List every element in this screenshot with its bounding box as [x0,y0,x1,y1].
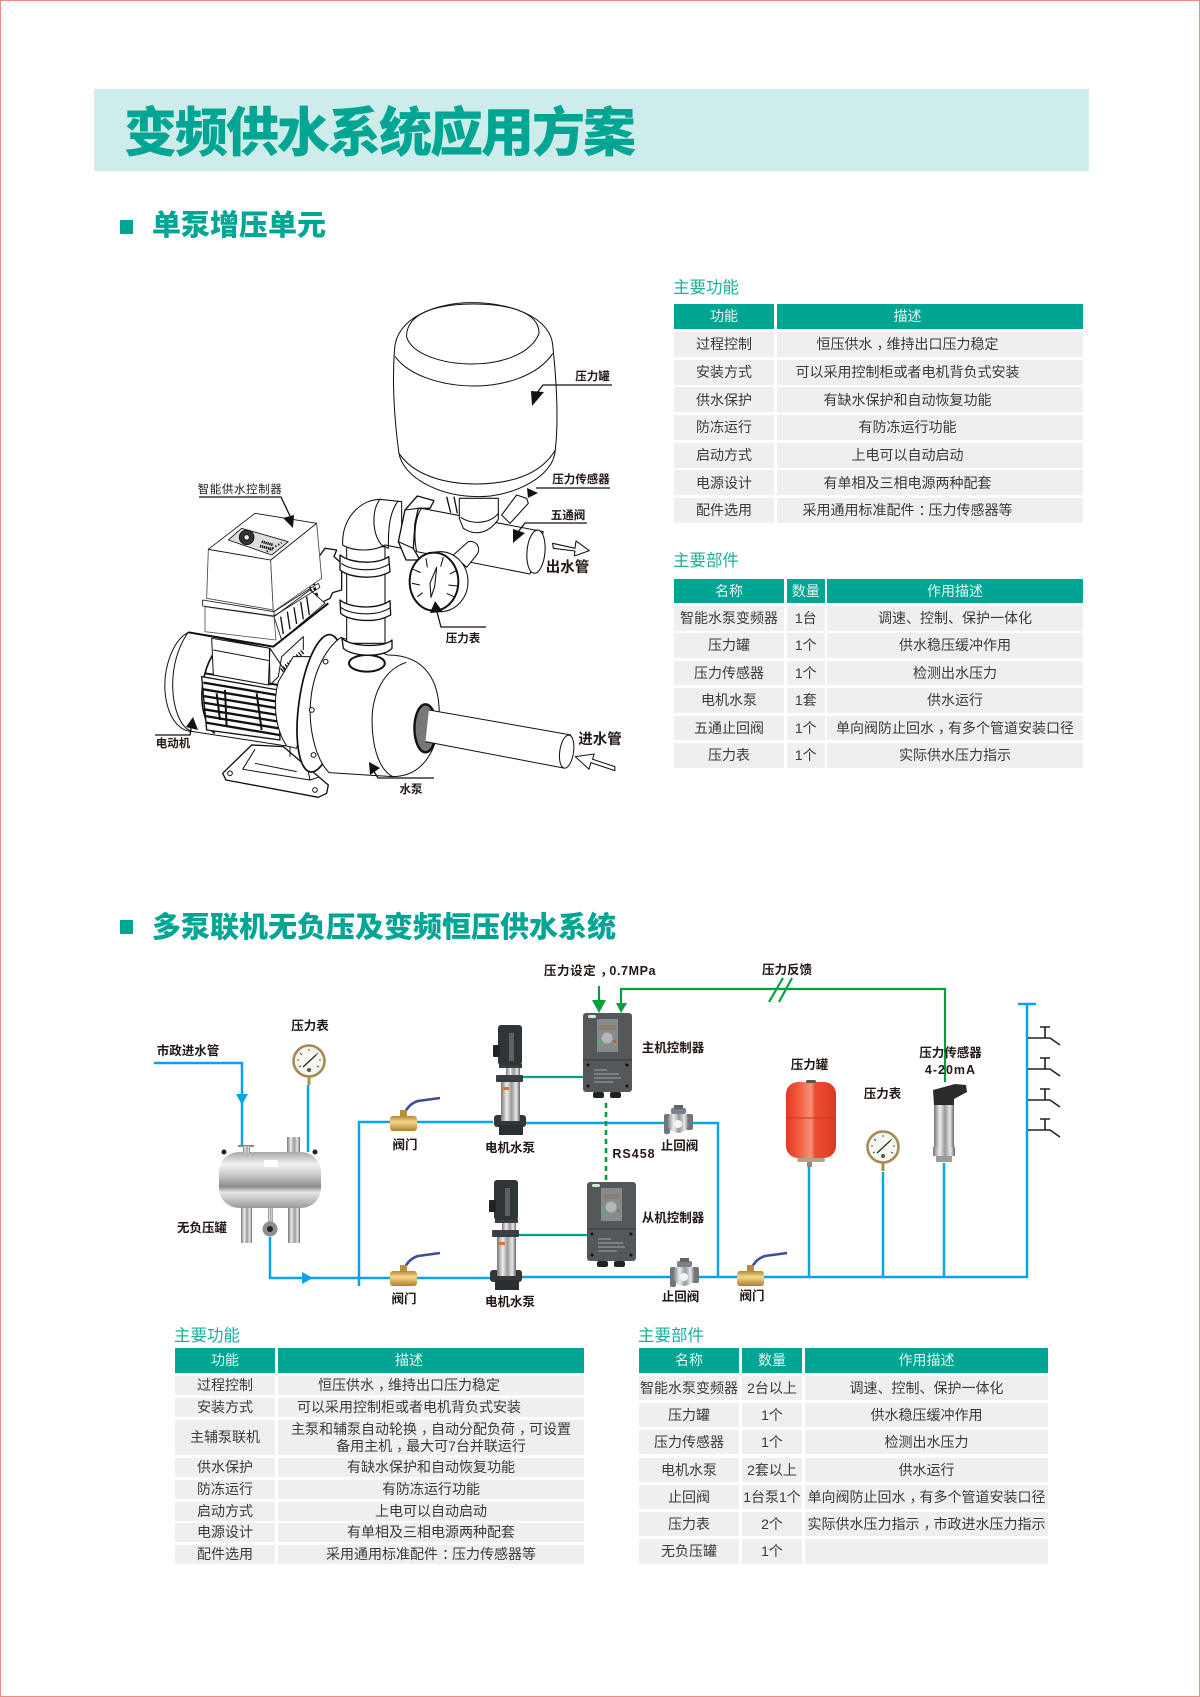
table: main functions 2: 安装方式 [197,1399,253,1415]
table: main functions 2: 有单相及三相电源两种配套 [347,1524,515,1540]
table: main functions 2: 可以采用控制柜或者电机背负式安装 [297,1399,521,1415]
label: main functions 1: 主要功能 [673,279,739,297]
table: main functions 1: 电源设计 [696,475,752,491]
table: main components 1: 1个 [795,637,817,653]
table: main components 2: 止回阀 [668,1489,710,1505]
label: master controller: 主机控制器 [642,1040,705,1055]
table: main functions 2: 上电可以自动启动 [375,1503,487,1519]
table: main functions 1 [674,304,1083,523]
table: main components 2: 1个 [761,1434,783,1450]
table: main functions 2: 过程控制 [197,1377,253,1393]
callout: five way valve: 五通阀 [551,508,585,522]
table: main functions 1: 供水保护 [696,392,752,408]
label: upper pump: 电机水泵 [485,1140,535,1155]
label: upper valve: 阀门 [392,1137,418,1152]
table: main functions 2: 有缺水保护和自动恢复功能 [347,1459,515,1475]
table: main components 1: 供水运行 [927,692,983,708]
table: main functions 2: 启动方式 [197,1503,253,1519]
label: outlet valve: 阀门 [739,1288,765,1303]
diagram: water supply piping [154,1004,1036,1286]
callout: five way valve [513,508,587,543]
table: main functions 1: 有单相及三相电源两种配套 [824,475,992,491]
table: main components 2: 压力传感器 [654,1434,724,1450]
table: main functions 1: 可以采用控制柜或者电机背负式安装 [796,364,1020,380]
table: main functions 1: 恒压供水 ，维持出口压力稳定 [816,336,998,352]
table: main functions 2: 电源设计 [197,1524,253,1540]
section marker: single pump [120,220,133,234]
table: main components 2: 数量 [758,1352,786,1368]
heading: multi pump system: 多泵联机无负压及变频恒压供水系统 [152,912,616,944]
table: main functions 2: 供水保护 [197,1459,253,1475]
table: main functions 2: 备用主机 ，最大可7台并联运行 [336,1438,526,1454]
user outlets [1028,1027,1060,1137]
callout: smart controller: 智能供水控制器 [198,482,282,496]
label: pressure set: 压力设定 ，0.7MPa [544,963,657,978]
illustration: pump body line art [289,632,615,777]
icon: upper valve [390,1098,440,1131]
pressure arrows [592,1000,627,1013]
table: main functions 1: 描述 [894,308,922,324]
table: main components 1: 电机水泵 [701,692,757,708]
label: pressure tank: 压力罐 [791,1057,829,1072]
pressure feedback line [599,978,945,1082]
table: main components 1: 压力传感器 [694,665,764,681]
flow arrow: inlet [236,1094,248,1105]
flow arrow: outlet [302,1272,313,1284]
table: main components 1: 1套 [795,692,817,708]
table: main components 1: 1个 [795,747,817,763]
table: main components 2: 智能水泵变频器 [640,1380,738,1396]
label: inlet pipe: 进水管 [578,730,622,748]
table: main components 2: 1台泵1个 [743,1489,801,1505]
table: main functions 2: 防冻运行 [197,1481,253,1497]
title: 变频供水系统应用方案 [124,104,634,163]
table: main functions 1: 防冻运行 [696,419,752,435]
label: slave controller: 从机控制器 [642,1210,705,1225]
table: main components 1: 作用描述 [927,583,983,599]
illustration: pipe work and gauge line art [340,495,589,655]
icon: upper check valve [664,1105,693,1134]
table: main components 1: 五通止回阀 [694,720,764,736]
callout: motor [155,717,198,750]
illustration: smart controller line art [188,513,342,647]
section marker: multi pump [120,920,133,934]
table: main components 1: 1个 [795,665,817,681]
icon: slave controller [587,1182,636,1267]
table: main functions 2: 功能 [211,1352,239,1368]
callout: smart controller [198,482,294,528]
table: main components 2: 作用描述 [898,1352,954,1368]
diagram labels [157,962,982,1309]
table: main components 1: 1个 [795,720,817,736]
table: main components 1: 调速、控制、保护一体化 [878,610,1032,626]
icon: break tank [219,1137,321,1243]
table: main components 2: 2套以上 [747,1462,797,1478]
icon: red pressure tank [786,1080,836,1167]
label: lower pump: 电机水泵 [485,1294,535,1309]
table: main components 1: 数量 [792,583,820,599]
label: inlet gauge: 压力表 [291,1018,329,1033]
table: main functions 2: 采用通用标准配件 ：压力传感器等 [326,1546,536,1562]
callout: water pump [369,762,434,796]
table: main components 2: 供水稳压缓冲作用 [870,1407,982,1423]
icon: master controller [583,1013,632,1098]
table: main components 1: 检测出水压力 [913,665,997,681]
icon: pressure sensor [933,1084,967,1162]
table: main functions 1: 启动方式 [696,447,752,463]
table: main components 2: 实际供水压力指示 ，市政进水压力指示 [808,1516,1046,1532]
table: main components 2: 1个 [761,1407,783,1423]
icon: lower pump [489,1180,522,1290]
table: main functions 2: 有防冻运行功能 [382,1481,480,1497]
table: main functions 2: 配件选用 [197,1546,253,1562]
table: main functions 1: 有缺水保护和自动恢复功能 [824,392,992,408]
table: main components 2: 单向阀防止回水 ，有多个管道安装口径 [808,1489,1046,1505]
table: main components 2 [639,1348,1048,1564]
label: upper check valve: 止回阀 [661,1138,698,1153]
callout: pressure tank [531,369,612,406]
label: lower check valve: 止回阀 [662,1289,699,1304]
illustration: motor and base line art [165,632,328,797]
heading: single pump unit: 单泵增压单元 [152,210,326,242]
table: main components 2: 无负压罐 [661,1543,717,1559]
callout: pressure gauge [430,601,486,645]
controller links [517,1077,587,1235]
RS458 link [605,1103,607,1180]
callout: motor: 电动机 [156,736,191,750]
label: outlet pipe: 出水管 [546,558,589,576]
table: main functions 2: 恒压供水 ，维持出口压力稳定 [318,1377,500,1393]
table: main components 2: 供水运行 [898,1462,954,1478]
table: main functions 1: 安装方式 [696,364,752,380]
label: main functions 2: 主要功能 [174,1327,240,1345]
icon: inlet gauge [294,1046,324,1085]
table: main functions 1: 有防冻运行功能 [858,419,956,435]
table: main components 2: 压力表 [668,1516,710,1532]
icon: lower valve [390,1253,440,1286]
table: main functions 1: 上电可以自动启动 [852,447,964,463]
title banner [94,89,1089,171]
callout: pressure sensor: 压力传感器 [552,472,610,486]
table: main components 2: 压力罐 [668,1407,710,1423]
table: main components 1: 智能水泵变频器 [680,610,778,626]
label: main components 1: 主要部件 [673,552,739,570]
table: main components 1: 压力罐 [708,637,750,653]
table: main components 2: 2个 [761,1516,783,1532]
table: main functions 1: 过程控制 [696,336,752,352]
table: main components 1: 1台 [795,610,817,626]
callout: pressure gauge: 压力表 [446,631,481,645]
table: main components 1: 单向阀防止回水 ，有多个管道安装口径 [836,720,1074,736]
table: main components 2: 调速、控制、保护一体化 [850,1380,1004,1396]
table: main functions 2: 主辅泵联机 [190,1429,260,1445]
table: main functions 1: 配件选用 [696,502,752,518]
callout: pressure tank: 压力罐 [575,369,610,383]
icon: lower check valve [670,1258,699,1287]
illustration: pressure tank line art [394,303,557,497]
table: main functions 2 [175,1348,584,1564]
callout: pressure sensor [527,472,610,498]
table: main functions 1: 采用通用标准配件 ：压力传感器等 [802,502,1012,518]
label: RS458: RS458 [612,1147,656,1161]
table: main components 1: 名称 [715,583,743,599]
label: outlet gauge: 压力表 [864,1086,902,1101]
label: pressure feedback: 压力反馈 [762,962,812,977]
icon: upper pump [493,1025,526,1135]
table: main components 2: 名称 [675,1352,703,1368]
table: main components 1 [674,579,1083,768]
table: main components 1: 压力表 [708,747,750,763]
table: main components 2: 1个 [761,1543,783,1559]
table: main components 2: 检测出水压力 [884,1434,968,1450]
icon: outlet gauge [868,1132,898,1171]
table: main components 1: 供水稳压缓冲作用 [899,637,1011,653]
label: municipal inlet: 市政进水管 [157,1043,219,1058]
label: pressure sensor: 压力传感器 [919,1045,982,1060]
table: main functions 2: 描述 [395,1352,423,1368]
icon: outlet valve [737,1253,787,1286]
table: main functions 2: 主泵和辅泵自动轮换 ，自动分配负荷 ，可设置 [291,1421,571,1437]
label: main components 2: 主要部件 [638,1327,704,1345]
label: break tank: 无负压罐 [177,1220,227,1235]
table: main components 2: 电机水泵 [661,1462,717,1478]
table: main functions 1: 功能 [710,308,738,324]
table: main components 1: 实际供水压力指示 [899,747,1011,763]
table: main components 2: 2台以上 [747,1380,797,1396]
callout: water pump: 水泵 [400,782,423,796]
label: signal range: 4-20mA [925,1063,976,1077]
label: lower valve: 阀门 [391,1291,417,1306]
